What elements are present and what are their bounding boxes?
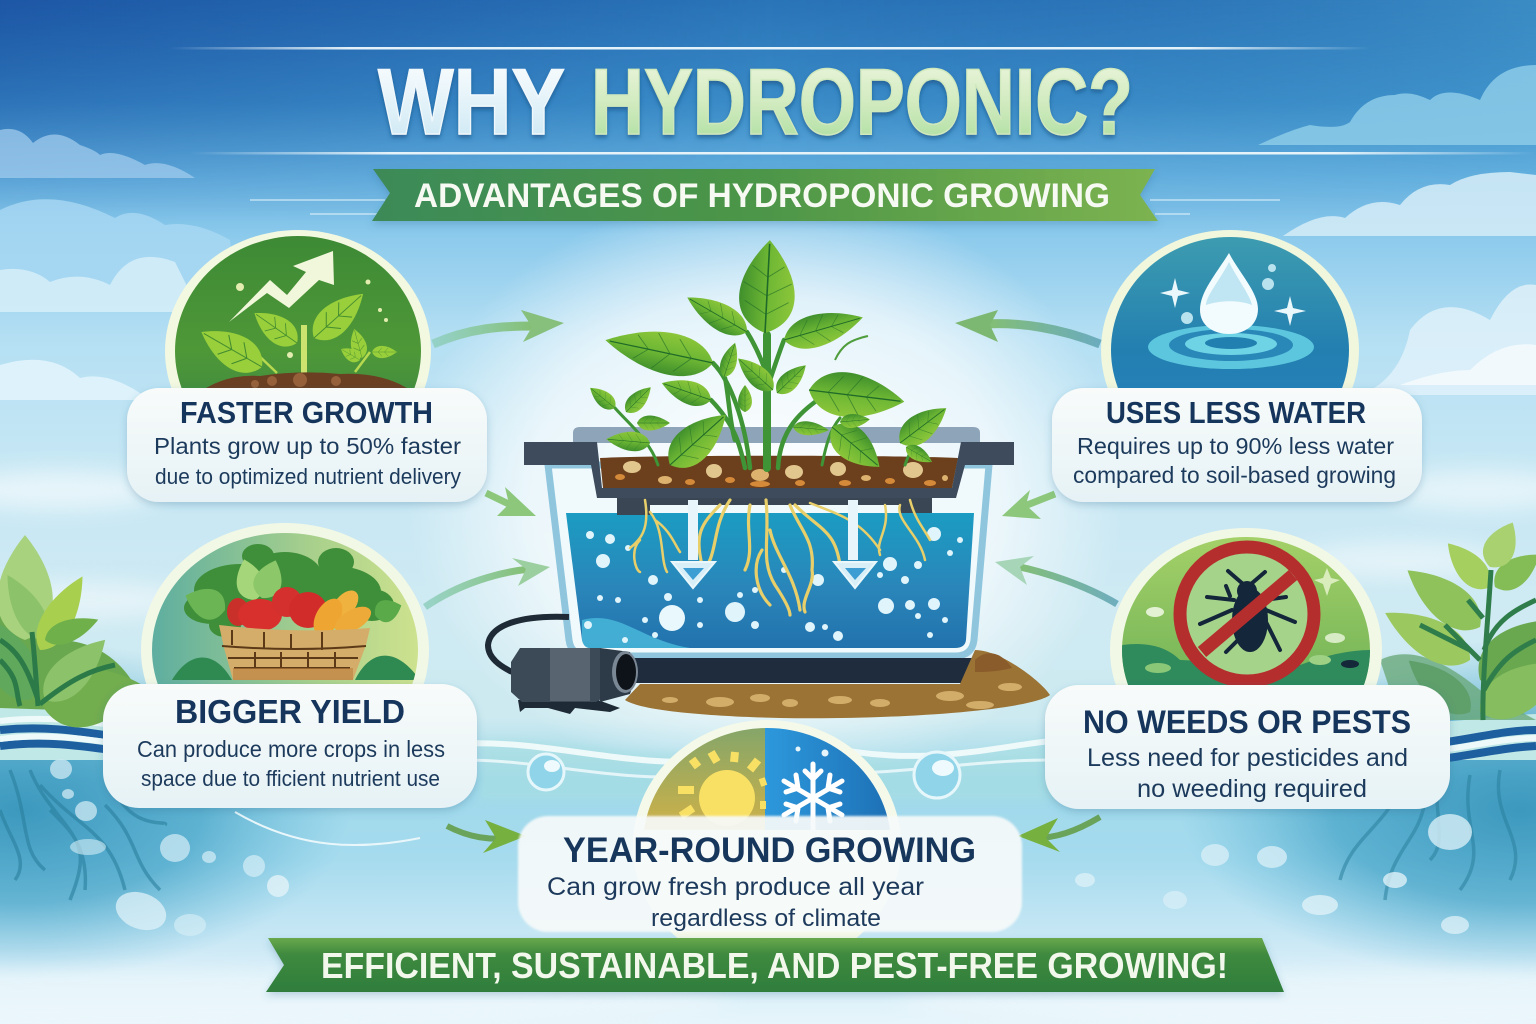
card: year-round growing: regardless of climate [651, 905, 881, 932]
hose [488, 617, 569, 672]
card: uses less water [1052, 388, 1422, 502]
panel: no weeds or pests [1045, 528, 1450, 809]
water roots and bubbles lower left [0, 759, 289, 937]
icon: sun and snowflake [636, 720, 898, 938]
card: year-round growing: YEAR-ROUND GROWING [563, 831, 976, 870]
card: year-round growing [518, 816, 1022, 932]
card: bigger yield: Can produce more crops in less [137, 736, 445, 762]
bottom ribbon: EFFICIENT, SUSTAINABLE, AND PEST-FREE GROWING! [321, 945, 1228, 986]
title: WHY [378, 49, 565, 154]
card: bigger yield: BIGGER YIELD [175, 693, 405, 730]
icon: plant with growth arrow [165, 230, 431, 388]
icon: basket of vegetables [141, 523, 429, 684]
card: bigger yield [103, 684, 477, 808]
card: year-round growing: Can grow fresh produce all year [547, 873, 924, 901]
card: faster growth: Plants grow up to 50% faster [154, 433, 461, 459]
panel: faster growth [127, 230, 487, 502]
net tray holder [617, 497, 932, 515]
glass tank [548, 465, 989, 656]
panel: uses less water [1052, 230, 1422, 502]
subtitle ribbon: ADVANTAGES OF HYDROPONIC GROWING [414, 177, 1110, 215]
title [378, 49, 1133, 154]
water highlights and bubbles [582, 527, 963, 648]
pump [511, 648, 638, 714]
card: no weeds or pests: Less need for pesticides and [1087, 744, 1408, 772]
dark tank base [610, 658, 974, 683]
tendril [835, 336, 868, 360]
arrows pointing to and from the tank [425, 310, 1117, 853]
card: bigger yield: space due to fficient nutrient use [141, 766, 440, 791]
plant stems [615, 332, 925, 468]
card: faster growth: due to optimized nutrient delivery [155, 464, 461, 489]
water roots and bubbles lower right [1075, 770, 1516, 934]
card: no weeds or pests [1045, 685, 1450, 809]
plant leaves [585, 239, 955, 480]
tray with rim [524, 442, 1014, 498]
panel: bigger yield [103, 523, 477, 808]
card: uses less water: compared to soil-based growing [1073, 462, 1396, 488]
water [566, 513, 974, 648]
subtitle ribbon [372, 169, 1158, 221]
white flow arrows [672, 500, 876, 588]
bubbles on water surface [528, 752, 960, 798]
panel: year-round growing [516, 720, 1024, 938]
card: no weeds or pests: no weeding required [1137, 775, 1367, 803]
card: uses less water: USES LESS WATER [1106, 395, 1366, 430]
card: no weeds or pests: NO WEEDS OR PESTS [1083, 704, 1411, 740]
side plant left [0, 535, 150, 734]
soil with pebbles [600, 456, 958, 488]
side plant right [1376, 516, 1536, 731]
tank back panel [573, 427, 980, 443]
card: uses less water: Requires up to 90% less water [1077, 433, 1394, 459]
icon: water drop with ripples [1101, 230, 1359, 388]
card: faster growth: FASTER GROWTH [180, 395, 433, 430]
soil under tank [625, 650, 1050, 718]
central hydroponic tank [488, 239, 1050, 718]
card: faster growth [127, 388, 487, 502]
icon: crossed-out bug [1110, 528, 1382, 685]
title: HYDROPONIC? [591, 49, 1133, 154]
roots [630, 500, 930, 615]
